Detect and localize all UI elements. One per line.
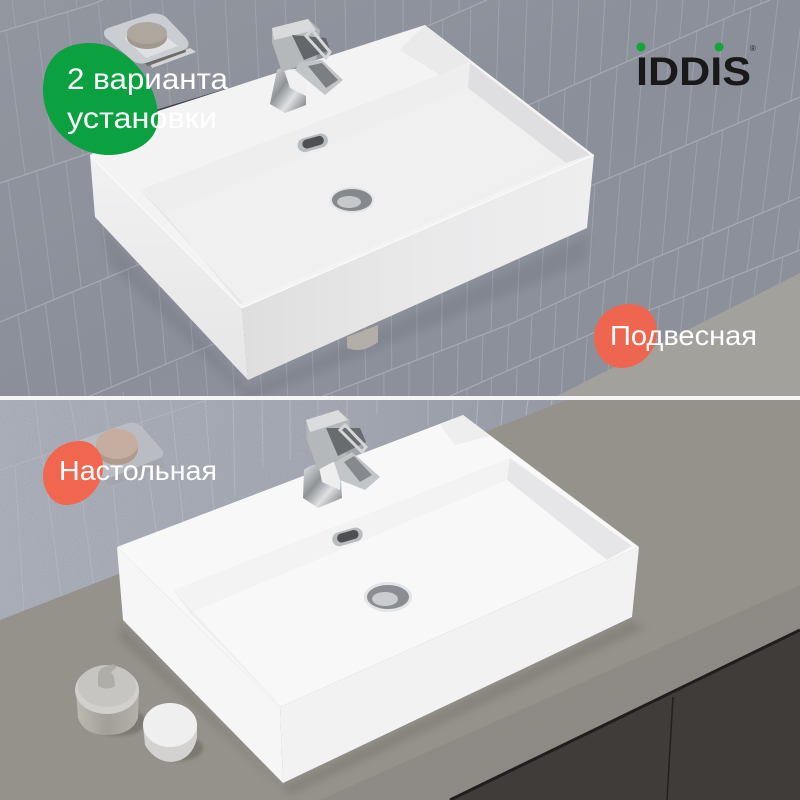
faucet [270, 19, 343, 113]
panel: wall-hung installation scene [0, 0, 800, 434]
faucet [303, 410, 380, 508]
cabinet [450, 630, 800, 800]
small jar [143, 703, 203, 762]
badge: 2 installation options: 2 варианта [67, 63, 228, 96]
soap dish on wall [76, 422, 166, 486]
tiled wall [0, 0, 800, 434]
badge: wall-hung label: Подвесная [610, 320, 757, 351]
badge: 2 installation options [43, 43, 228, 155]
drain pipe [347, 325, 378, 350]
panel: countertop installation scene [0, 400, 800, 800]
wall shadow under basin [100, 225, 590, 402]
drain [330, 187, 374, 213]
countertop [0, 400, 800, 800]
logo: IDDIS: IDDIS [636, 50, 751, 94]
tiled wall [0, 400, 567, 620]
logo: IDDIS: ® [750, 44, 756, 53]
floor [557, 273, 800, 396]
badge: countertop label: Настольная [59, 455, 217, 486]
wall-hung basin [90, 25, 594, 380]
soap dish on wall [104, 13, 196, 68]
overflow [332, 528, 363, 546]
overflow [296, 132, 330, 154]
badge: wall-hung label [594, 304, 757, 368]
separator [0, 396, 800, 400]
drain [364, 582, 412, 612]
pump jar [75, 664, 146, 736]
dark gap behind basin [155, 27, 428, 111]
badge: countertop label [43, 441, 217, 505]
badge: 2 installation options: установки [67, 102, 217, 135]
shadow under basin [120, 620, 645, 795]
countertop basin [117, 415, 639, 783]
